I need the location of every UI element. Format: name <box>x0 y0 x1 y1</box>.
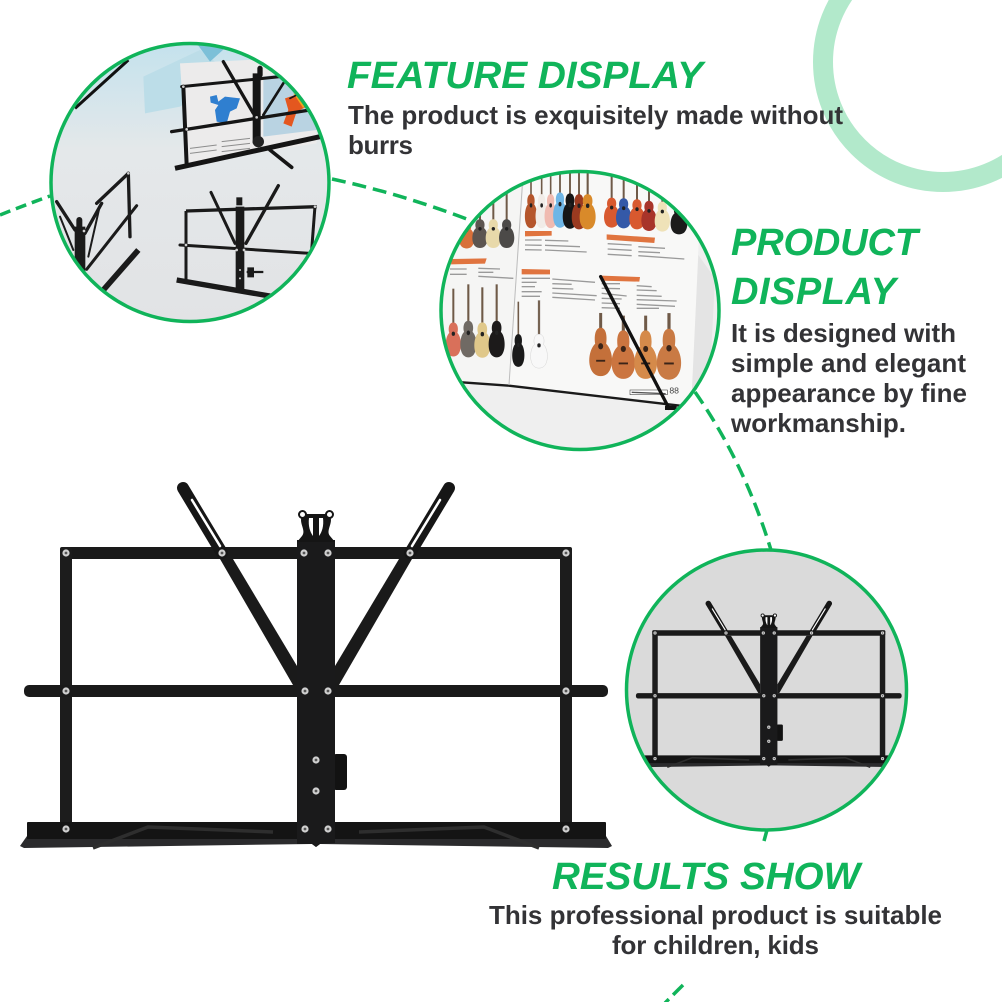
dashed connector: feature circle to product circle <box>332 179 472 221</box>
left ledge bracket <box>93 827 273 848</box>
circle outline <box>626 550 906 830</box>
panel: results show circle <box>626 550 907 831</box>
circle outline <box>51 44 329 322</box>
text block: results show description: This professional product is suitable <box>489 900 942 930</box>
heading: feature display: FEATURE DISPLAY <box>347 55 707 97</box>
text block: product display description: simple and elegant <box>731 348 966 378</box>
heading: product display: DISPLAY <box>731 271 900 313</box>
panel: product display circle <box>441 157 719 450</box>
centre column <box>297 540 335 847</box>
top row guitars <box>524 182 536 228</box>
decorative ring: top right <box>823 0 1002 182</box>
middle rail <box>24 685 608 697</box>
black page retainer arm <box>601 277 669 408</box>
text block: results show description: for children, kids <box>612 930 819 960</box>
right upright <box>560 547 572 827</box>
text block: product display description: appearance by fine <box>731 378 967 408</box>
base ledge lip <box>20 836 612 848</box>
heading: product display: PRODUCT <box>731 222 921 264</box>
right support arm <box>335 488 449 685</box>
base ledge <box>27 822 606 839</box>
dashed connector: stub below results circle <box>764 830 767 841</box>
dashed connector: product circle to results circle <box>695 392 771 550</box>
orange tags <box>451 231 655 282</box>
right ledge bracket <box>359 827 539 848</box>
left page guitars <box>460 226 474 248</box>
panel: feature display circle <box>50 43 330 323</box>
main product image: music stand <box>20 488 612 848</box>
screws <box>62 549 570 833</box>
text block: feature display description: The product is exquisitely made without <box>348 100 843 130</box>
text block: product display description: workmanship. <box>730 408 906 438</box>
photo: open guitar catalogue <box>441 157 719 450</box>
circle outline <box>441 172 719 450</box>
photo: small music stand on grey <box>626 550 907 831</box>
text block: product display description: It is designed with <box>731 318 956 348</box>
dashed connector: left edge to feature circle <box>0 196 50 215</box>
adjustment knob <box>333 754 347 790</box>
top rail <box>60 547 572 559</box>
centre guitars <box>512 302 524 367</box>
left upright <box>60 547 72 827</box>
left support arm <box>183 488 297 685</box>
photo: three stands on pale background <box>50 43 330 323</box>
heading: results show: RESULTS SHOW <box>552 856 863 898</box>
wooden guitars <box>589 313 612 376</box>
lyre top ornament <box>297 511 335 542</box>
text block: feature display description: burrs <box>348 130 413 160</box>
page footer <box>630 390 667 395</box>
dashed connector: bottom edge <box>665 985 683 1002</box>
catalogue text lines <box>450 240 684 308</box>
page number: 88 <box>669 385 679 395</box>
